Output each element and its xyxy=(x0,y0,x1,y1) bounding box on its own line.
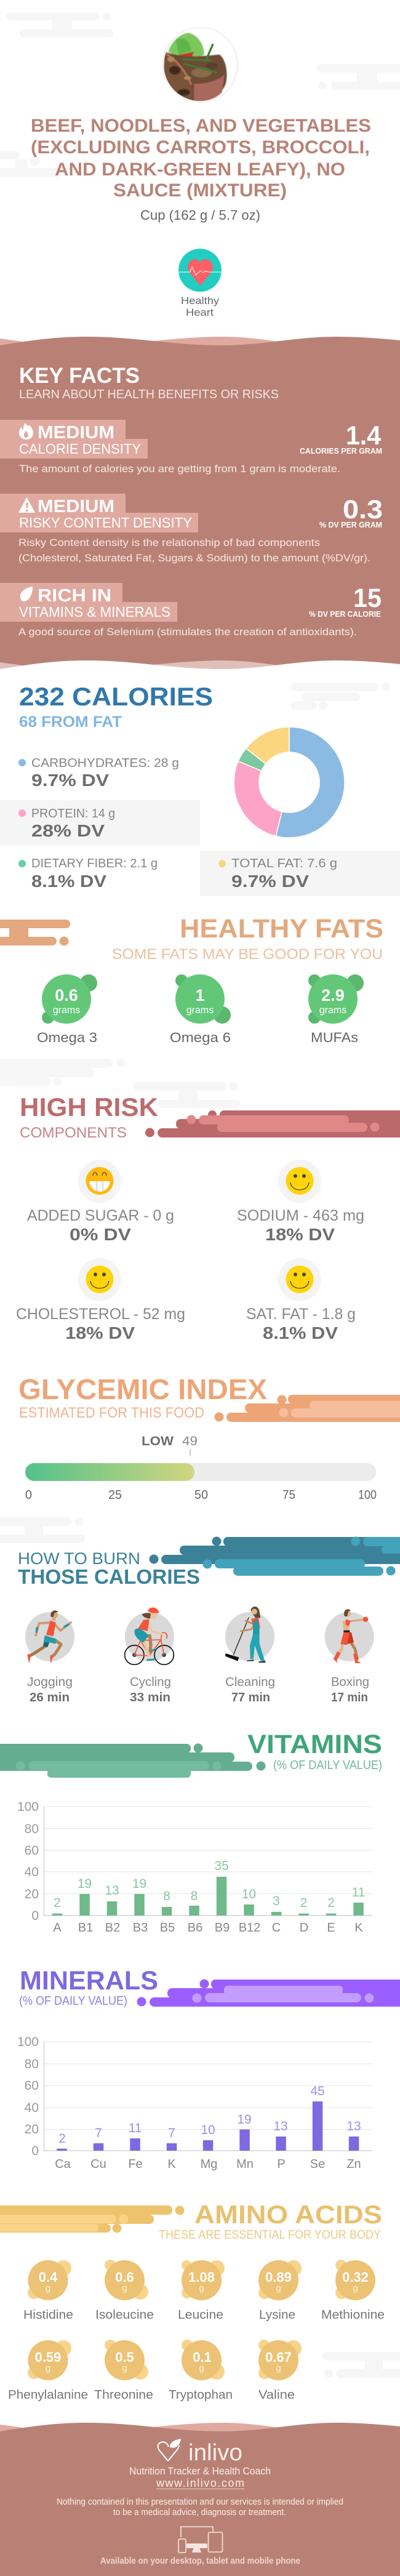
header xyxy=(31,28,371,318)
amino: phenylalanine: Phenylalanine xyxy=(8,2388,88,2402)
title: SAUCE (MIXTURE) xyxy=(113,180,287,201)
bar chart: minerals: 13 xyxy=(346,2119,361,2133)
disclaimer xyxy=(57,2497,343,2518)
glycemic decorative banner xyxy=(214,1395,400,1422)
bar chart: vitamins: 60 xyxy=(25,1844,39,1858)
legend: protein: PROTEIN: 14 g xyxy=(31,807,115,821)
amino: methionine: 0.32 xyxy=(342,2269,369,2285)
bar chart: vitamins: 100 xyxy=(17,1800,39,1814)
healthy heart label: Heart xyxy=(186,307,214,318)
activity: cleaning: Cleaning xyxy=(225,1675,275,1689)
bar chart: minerals: K xyxy=(167,2157,176,2171)
activity: cycling: 33 min xyxy=(130,1691,170,1704)
bar chart: vitamins: A xyxy=(53,1921,62,1935)
legend: protein: 28% DV xyxy=(31,821,105,840)
food photo xyxy=(163,28,238,102)
legend: dietary fiber: DIETARY FIBER: 2.1 g xyxy=(31,857,158,870)
activity: boxing: Boxing xyxy=(331,1675,369,1689)
activity: boxing: 17 min xyxy=(331,1691,368,1704)
bar chart: minerals: Fe xyxy=(128,2157,143,2171)
vitamins subheading: (% OF DAILY VALUE) xyxy=(273,1759,382,1772)
fact: rich in vitamins and minerals: A good source of Selenium (stimulates the creation of antioxidants). xyxy=(18,626,357,638)
icon: boxer xyxy=(325,1609,374,1663)
title: (EXCLUDING CARROTS, BROCCOLI, xyxy=(31,137,370,158)
amino: tryptophan xyxy=(169,2340,233,2402)
gauge scale xyxy=(25,1488,377,1502)
minerals subheading: (% OF DAILY VALUE) xyxy=(19,1994,127,2008)
panel: minerals xyxy=(17,1966,400,2171)
amino: lysine: 0.89 xyxy=(265,2269,292,2285)
gauge scale: 75 xyxy=(282,1488,295,1502)
bar chart: vitamins: B2 xyxy=(105,1921,120,1935)
fact: rich in vitamins and minerals: VITAMINS & MINERALS xyxy=(19,604,170,620)
amino: tryptophan: 0.1 xyxy=(193,2349,212,2365)
glycemic gauge xyxy=(25,1463,376,1481)
amino: methionine xyxy=(321,2260,385,2322)
activity: jogging: Jogging xyxy=(27,1675,73,1689)
bar chart: minerals: Cu xyxy=(90,2157,106,2171)
bar chart: vitamins: 8 xyxy=(191,1889,198,1903)
bar chart: minerals: 11 xyxy=(129,2121,142,2135)
bar chart: vitamins: C xyxy=(272,1921,281,1935)
fact: risky content density: MEDIUM xyxy=(38,497,114,516)
amino: lysine: g xyxy=(276,2283,281,2293)
icon: person sweeping xyxy=(225,1607,274,1663)
bar chart: minerals: 13 xyxy=(273,2119,288,2133)
bar chart: minerals: 100 xyxy=(17,2035,39,2049)
bar chart: vitamins: 2 xyxy=(300,1896,307,1910)
bar chart: vitamins: B3 xyxy=(133,1921,148,1935)
legend: carbohydrates: CARBOHYDRATES: 28 g xyxy=(31,756,179,770)
activity: cycling: Cycling xyxy=(130,1675,171,1689)
vitamins decorative banner xyxy=(0,1743,266,1778)
amino: lysine xyxy=(258,2260,302,2322)
amino: leucine: 1.08 xyxy=(188,2269,215,2285)
fact: rich in vitamins and minerals xyxy=(0,583,382,638)
bar chart: minerals: Mn xyxy=(236,2157,254,2171)
amino: leucine: Leucine xyxy=(178,2308,223,2322)
activity: boxing xyxy=(325,1609,374,1704)
glycemic value: 49 xyxy=(182,1434,198,1448)
healthy fats subheading: SOME FATS MAY BE GOOD FOR YOU xyxy=(112,946,383,963)
icon: devices xyxy=(178,2527,223,2553)
bar chart: vitamins: B12 xyxy=(239,1921,260,1935)
amino: isoleucine: g xyxy=(122,2283,127,2293)
bar chart: vitamins: 35 xyxy=(214,1859,229,1873)
bar chart: minerals: 19 xyxy=(237,2113,252,2127)
panel: footer xyxy=(0,2423,400,2576)
legend: total fat: 9.7% DV xyxy=(231,872,309,891)
risk item: cholesterol: CHOLESTEROL - 52 mg xyxy=(16,1306,185,1323)
fact: calorie density: CALORIES PER GRAM xyxy=(300,446,382,455)
legend: dietary fiber xyxy=(18,857,158,891)
bar chart: minerals: 45 xyxy=(310,2084,325,2098)
bar chart: minerals: 20 xyxy=(25,2122,39,2137)
healthy fats decorative banner xyxy=(0,920,70,945)
bar chart: vitamins: D xyxy=(300,1921,308,1935)
fact: risky content density: % DV PER GRAM xyxy=(319,520,382,529)
amino: tryptophan: g xyxy=(199,2363,204,2373)
glycemic value xyxy=(142,1434,198,1456)
gauge scale: 0 xyxy=(25,1488,32,1502)
amino: threonine: Threonine xyxy=(94,2388,153,2402)
calories from fat: 68 FROM FAT xyxy=(19,713,122,731)
omega 6: grams xyxy=(186,1005,214,1016)
availability note: Available on your desktop, tablet and mobile phone xyxy=(100,2556,300,2566)
bar chart: vitamins: 11 xyxy=(352,1885,365,1900)
activity: jogging: 26 min xyxy=(30,1691,70,1704)
omega 6: 1 xyxy=(195,986,205,1005)
icon: jogger xyxy=(25,1610,74,1663)
bar chart: minerals: Se xyxy=(310,2157,325,2171)
key facts heading: KEY FACTS xyxy=(19,364,140,388)
disclaimer: to be a medical advice, diagnosis or treatment. xyxy=(113,2508,286,2518)
omega 3: grams xyxy=(53,1005,80,1016)
panel: healthy fats xyxy=(0,914,383,1045)
icon: healthy heart xyxy=(178,249,222,292)
high risk heading: HIGH RISK xyxy=(20,1093,158,1121)
amino: histidine xyxy=(23,2260,73,2322)
bar chart: vitamins: 8 xyxy=(163,1889,170,1903)
calories heading: 232 CALORIES xyxy=(19,682,213,711)
key facts subheading: LEARN ABOUT HEALTH BENEFITS OR RISKS xyxy=(19,388,279,401)
vitamins heading: VITAMINS xyxy=(247,1730,382,1759)
icon: smiling face xyxy=(286,1266,314,1293)
bar chart: vitamins: B1 xyxy=(78,1921,93,1935)
amino: lysine: Lysine xyxy=(259,2308,295,2322)
glycemic index heading: GLYCEMIC INDEX xyxy=(18,1373,267,1405)
healthy fats heading: HEALTHY FATS xyxy=(180,914,383,944)
risk item: added sugar xyxy=(27,1160,174,1244)
amino: isoleucine xyxy=(95,2260,154,2322)
risk item: sodium: SODIUM - 463 mg xyxy=(237,1207,364,1224)
serving size: Cup (162 g / 5.7 oz) xyxy=(140,207,260,223)
amino: valine: 0.67 xyxy=(265,2349,292,2365)
legend: protein xyxy=(18,807,115,840)
healthy heart label: Healthy xyxy=(181,295,220,307)
bar chart: minerals: 60 xyxy=(25,2079,39,2093)
amino acids decorative banner xyxy=(0,2205,185,2233)
icon: warning triangle xyxy=(18,497,35,513)
amino: isoleucine: Isoleucine xyxy=(95,2308,154,2322)
icon: cyclist xyxy=(125,1608,174,1664)
panel: how to burn those calories: THOSE CALORIES xyxy=(18,1565,200,1588)
burn heading: HOW TO BURN xyxy=(18,1549,140,1568)
bar chart: minerals: 7 xyxy=(168,2126,175,2140)
fact: risky content density: Risky Content density is the relationship of bad components xyxy=(18,537,320,548)
amino: threonine xyxy=(94,2340,153,2402)
bar chart: vitamins: 0 xyxy=(31,1909,39,1923)
omega 6: Omega 6 xyxy=(170,1030,231,1045)
amino: histidine: Histidine xyxy=(23,2308,73,2322)
bar chart: minerals: 10 xyxy=(201,2123,215,2137)
title: BEEF, NOODLES, AND VEGETABLES xyxy=(31,116,371,136)
amino: threonine: g xyxy=(122,2363,127,2373)
bar chart: vitamins: 80 xyxy=(25,1822,39,1836)
risk item: added sugar: ADDED SUGAR - 0 g xyxy=(27,1207,174,1224)
minerals decorative banner xyxy=(137,1980,400,2007)
high risk decorative banner xyxy=(145,1110,400,1138)
amino: leucine xyxy=(178,2260,225,2322)
fact: calorie density: CALORIE DENSITY xyxy=(19,441,141,457)
fact: calorie density: MEDIUM xyxy=(38,423,114,443)
risk item: saturated fat: SAT. FAT - 1.8 g xyxy=(246,1306,356,1323)
amino: valine: g xyxy=(276,2363,281,2373)
bar chart: vitamins: E xyxy=(327,1921,335,1935)
fact: calorie density: The amount of calories you are getting from 1 gram is moderate. xyxy=(19,463,340,475)
bar chart: vitamins: 13 xyxy=(105,1884,119,1898)
legend: total fat: TOTAL FAT: 7.6 g xyxy=(231,857,337,870)
bar chart: vitamins: 19 xyxy=(132,1877,146,1891)
amino: valine xyxy=(258,2340,302,2402)
fact: risky content density: (Cholesterol, Saturated Fat, Sugars & Sodium) to the amount (%DV/gr). xyxy=(18,552,370,564)
high risk subheading: COMPONENTS xyxy=(20,1125,127,1141)
icon: flame xyxy=(19,423,33,439)
panel: high risk components xyxy=(16,1093,400,1342)
icon: smiling face xyxy=(86,1266,113,1293)
amino: isoleucine: 0.6 xyxy=(115,2269,134,2285)
icon: smiling face xyxy=(286,1167,314,1195)
bar chart: vitamins: 2 xyxy=(54,1896,61,1910)
gauge scale: 100 xyxy=(358,1488,377,1502)
fact: risky content density: 0.3 xyxy=(343,495,383,524)
logo: inlivo xyxy=(158,2439,242,2466)
bar chart: minerals: 7 xyxy=(95,2126,102,2140)
icon: grinning face xyxy=(86,1167,113,1195)
omega 3: Omega 3 xyxy=(37,1030,97,1045)
bar chart: vitamins: B5 xyxy=(160,1921,175,1935)
logo: inlivo: inlivo xyxy=(188,2440,242,2466)
gauge scale: 50 xyxy=(194,1488,208,1502)
amino: threonine: 0.5 xyxy=(115,2349,134,2365)
omega 6 xyxy=(170,974,231,1045)
bar chart: vitamins: 19 xyxy=(78,1877,92,1891)
amino: histidine: 0.4 xyxy=(39,2269,58,2285)
bar chart: minerals: 2 xyxy=(58,2132,66,2146)
bar chart: vitamins xyxy=(17,1800,372,1935)
amino acids subheading: THESE ARE ESSENTIAL FOR YOUR BODY xyxy=(159,2228,381,2242)
fact: calorie density xyxy=(0,420,382,475)
website: www.inlivo.com xyxy=(156,2477,244,2489)
tagline: Nutrition Tracker & Health Coach xyxy=(129,2465,271,2477)
activity: cleaning xyxy=(225,1607,275,1704)
panel: vitamins xyxy=(0,1730,382,1935)
mufas: MUFAs xyxy=(311,1030,358,1045)
bar chart: vitamins: 10 xyxy=(242,1887,256,1901)
amino: phenylalanine: g xyxy=(46,2363,50,2373)
activity: cleaning: 77 min xyxy=(231,1691,270,1704)
bar chart: vitamins: K xyxy=(354,1921,363,1935)
bar chart: vitamins: 20 xyxy=(25,1887,39,1901)
activity: jogging xyxy=(25,1610,74,1704)
bar chart: vitamins: 3 xyxy=(273,1894,280,1908)
mufas: 2.9 xyxy=(321,986,345,1005)
bar chart: minerals: P xyxy=(277,2157,286,2171)
bar chart: minerals: 40 xyxy=(25,2101,39,2115)
bar chart: minerals: Ca xyxy=(55,2157,71,2171)
risk item: added sugar: 0% DV xyxy=(70,1225,131,1244)
gauge scale: 25 xyxy=(108,1488,122,1502)
amino: methionine: Methionine xyxy=(321,2308,385,2322)
icon: leaf xyxy=(20,587,33,601)
risk item: sodium: 18% DV xyxy=(265,1225,335,1244)
donut chart xyxy=(234,727,345,838)
risk item: sodium xyxy=(237,1160,364,1244)
bar chart: minerals xyxy=(17,2035,372,2171)
fact: calorie density: 1.4 xyxy=(346,421,381,451)
glycemic index subheading: ESTIMATED FOR THIS FOOD xyxy=(19,1405,204,1421)
legend: total fat xyxy=(218,857,337,891)
panel: how to burn those calories xyxy=(18,1536,400,1704)
bar chart: minerals: 0 xyxy=(31,2144,39,2158)
legend: carbohydrates xyxy=(18,756,179,790)
panel: amino acids xyxy=(0,2200,385,2402)
panel: glycemic index xyxy=(18,1373,400,1502)
minerals heading: MINERALS xyxy=(20,1966,158,1996)
bar chart: vitamins: 2 xyxy=(327,1896,335,1910)
amino: methionine: g xyxy=(353,2283,358,2293)
mufas: grams xyxy=(319,1005,346,1016)
amino: valine: Valine xyxy=(258,2388,295,2402)
legend: dietary fiber: 8.1% DV xyxy=(31,872,106,891)
omega 3: 0.6 xyxy=(55,986,78,1005)
fact: risky content density xyxy=(0,494,383,564)
bar chart: vitamins: 40 xyxy=(25,1865,39,1879)
amino acids heading: AMINO ACIDS xyxy=(194,2200,382,2229)
title: AND DARK-GREEN LEAFY), NO xyxy=(55,159,345,180)
legend: carbohydrates: 9.7% DV xyxy=(31,771,109,790)
amino: tryptophan: Tryptophan xyxy=(169,2388,233,2402)
bar chart: minerals: 80 xyxy=(25,2057,39,2071)
amino: leucine: g xyxy=(199,2283,204,2293)
healthy heart label xyxy=(181,295,220,318)
burn decorative banner xyxy=(149,1536,400,1576)
amino: histidine: g xyxy=(46,2283,50,2293)
fact: rich in vitamins and minerals: RICH IN xyxy=(38,586,111,606)
amino: phenylalanine xyxy=(8,2340,88,2402)
bar chart: minerals: Zn xyxy=(346,2157,361,2171)
legend backgrounds xyxy=(0,800,400,896)
omega 3 xyxy=(37,974,97,1045)
panel: key facts xyxy=(0,337,400,677)
bar chart: vitamins: B6 xyxy=(188,1921,202,1935)
fact: rich in vitamins and minerals: 15 xyxy=(353,584,382,613)
risk item: saturated fat xyxy=(246,1258,356,1342)
fact: risky content density: RISKY CONTENT DENSITY xyxy=(19,515,192,531)
title xyxy=(31,116,371,201)
bar chart: vitamins: B9 xyxy=(215,1921,230,1935)
panel: calories xyxy=(0,682,400,896)
bar chart: minerals: Mg xyxy=(201,2157,217,2171)
risk item: cholesterol: 18% DV xyxy=(65,1323,135,1342)
disclaimer: Nothing contained in this presentation and our services is intended or implied xyxy=(57,2497,343,2507)
mufas xyxy=(308,974,364,1045)
glycemic value: LOW xyxy=(142,1434,174,1448)
risk item: cholesterol xyxy=(16,1258,185,1342)
risk item: saturated fat: 8.1% DV xyxy=(263,1323,338,1342)
amino: phenylalanine: 0.59 xyxy=(35,2349,61,2365)
fact: rich in vitamins and minerals: % DV PER CALORIE xyxy=(309,609,381,619)
activity: cycling xyxy=(125,1608,174,1704)
